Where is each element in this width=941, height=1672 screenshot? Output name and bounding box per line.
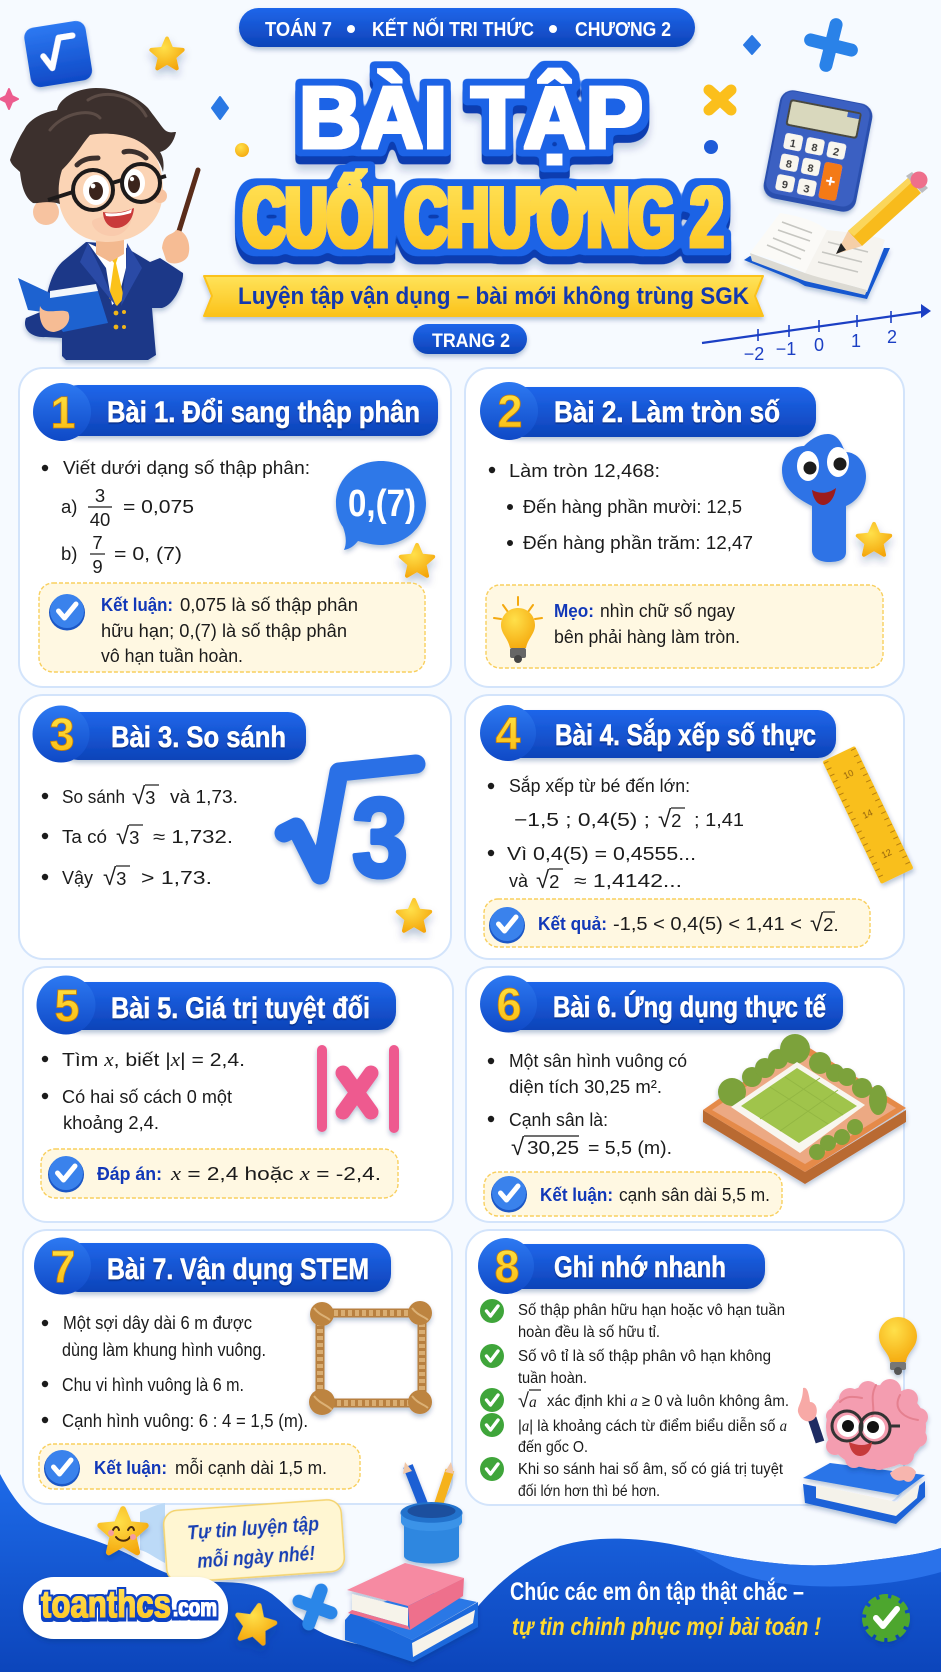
icon: speech bubble 0,(7) <box>336 461 426 550</box>
illustration: square yard garden <box>703 1034 906 1184</box>
teacher suit <box>25 242 183 360</box>
icon: calculator: 8 <box>810 142 819 155</box>
teacher head <box>58 132 163 242</box>
icon: star top left <box>151 38 183 68</box>
exercise text 4: −1,5 ; 0,4(5) ; <box>514 809 650 830</box>
icon: square root badge <box>23 20 93 88</box>
icon: speech bubble 0,(7): 0,(7) <box>348 483 416 525</box>
callout: kết luận 1 <box>39 583 425 672</box>
icon: star <box>398 900 430 931</box>
illustration: stacked books <box>345 1563 478 1662</box>
heading 5: Bài 5. Giá trị tuyệt đối <box>111 992 370 1025</box>
illustration: brain mascot on book <box>798 1379 928 1524</box>
heading 7: 7 <box>50 1241 76 1292</box>
number line: 1 <box>851 331 861 351</box>
exercise text 6: Một sân hình vuông có <box>509 1050 687 1071</box>
brain face <box>832 1411 900 1456</box>
exercise text 7 <box>42 1312 308 1431</box>
heading 2: 2 <box>497 386 523 437</box>
exercise text 3: Ta có <box>62 826 107 847</box>
exercise text 7: dùng làm khung hình vuông. <box>62 1339 266 1360</box>
brain book <box>803 1463 925 1524</box>
exercise text 6: √ <box>511 1134 525 1161</box>
callout: kết quả: -1,5 < 0,4(5) < 1,41 < <box>613 913 802 934</box>
teacher pointer <box>170 170 198 260</box>
exercise text 6: diện tích 30,25 m². <box>509 1076 662 1097</box>
exercise text 3 <box>42 783 238 891</box>
top tag pill: KẾT NỐI TRI THỨC <box>372 17 534 41</box>
illustration: pencil cup <box>400 1462 462 1564</box>
heading 6: Bài 6. Ứng dụng thực tế <box>553 990 826 1024</box>
exercise text 5: Tìm x, biết | x| = 2,4. <box>62 1049 245 1071</box>
callout: kết luận 6: cạnh sân dài 5,5 m. <box>619 1184 770 1205</box>
icon: plus bottom <box>293 1584 337 1630</box>
decorative shapes <box>0 20 856 157</box>
exercise text 2: Đến hàng phần mười: 12,5 <box>523 496 742 517</box>
icon: smiling number mascot <box>782 434 866 562</box>
heading 7: Bài 7. Vận dụng STEM <box>107 1253 369 1286</box>
exercise text 6: Cạnh sân là: <box>509 1109 608 1130</box>
exercise text 4: ≈ 1,4142... <box>574 870 682 891</box>
logo pill <box>23 1577 228 1639</box>
panel 3: so sánh <box>19 695 451 959</box>
heading 5: 5 <box>54 980 80 1031</box>
icon: calculator: + <box>824 171 837 192</box>
callout: đáp án: x = 2,4 hoặc x = -2,4. <box>170 1163 381 1185</box>
icon: light bulb <box>494 597 542 663</box>
callout: kết quả: Kết quả: <box>538 913 607 934</box>
icon: green check badge <box>866 1598 906 1638</box>
icon: rope square <box>309 1301 432 1415</box>
top tag pill <box>239 8 695 47</box>
exercise text 6: 30,25 <box>527 1137 579 1158</box>
panel 6: ứng dụng thực tế <box>466 967 906 1222</box>
number line: 0 <box>814 335 824 355</box>
teacher eyes and glasses <box>83 175 109 205</box>
ribbon curl <box>140 1503 165 1563</box>
main title line 2: CUỐI CHƯƠNG 2 <box>243 170 723 266</box>
number line: 2 <box>887 327 897 347</box>
exercise text 5: khoảng 2,4. <box>63 1112 159 1133</box>
exercise text 4: √2 <box>536 867 559 894</box>
exercise text 2 <box>489 460 753 553</box>
page label pill <box>413 324 527 354</box>
teacher hair <box>10 88 176 204</box>
logo pill: toanthcs <box>41 1584 171 1626</box>
exercise text 3: và 1,73. <box>170 786 238 807</box>
callout: đáp án: Đáp án: <box>97 1163 162 1184</box>
exercise text 1 <box>42 457 310 577</box>
panel 2: làm tròn số <box>465 368 904 687</box>
exercise text 1: 7 <box>92 532 103 553</box>
heading 6: 6 <box>496 979 522 1030</box>
subtitle ribbon: Luyện tập vận dụng – bài mới không trùng SGK <box>238 283 750 310</box>
icon: absolute value x <box>322 1050 394 1128</box>
callout: kết luận 6 <box>484 1172 782 1216</box>
closing message: tự tin chinh phục mọi bài toán ! <box>512 1613 821 1641</box>
heading 4 <box>480 705 836 761</box>
heading 1: Bài 1. Đổi sang thập phân <box>107 396 420 429</box>
heading 1: 1 <box>50 387 76 438</box>
icon: light bulb panel 8 <box>879 1317 917 1375</box>
exercise text 1: 40 <box>90 509 110 530</box>
message note: Tự tin luyện tập <box>187 1513 320 1545</box>
exercise text 1: a) <box>61 496 77 517</box>
icon: ruler: 12 <box>880 847 893 860</box>
heading 4: Bài 4. Sắp xếp số thực <box>555 718 816 752</box>
brain arm and hand <box>812 1418 820 1442</box>
icon: star bottom <box>233 1601 278 1645</box>
icon: calculator: 2 <box>832 146 840 159</box>
exercise text 3: So sánh <box>62 786 125 807</box>
panel 8: ghi nhớ nhanh <box>466 1230 904 1505</box>
exercise text 4: ; 1,41 <box>694 809 744 830</box>
illustration: teacher character <box>10 88 198 360</box>
callout: kết luận 6: Kết luận: <box>540 1184 613 1205</box>
panel 4: sắp xếp số thực <box>465 695 914 959</box>
reminder list: hoàn đều là số hữu tỉ. <box>518 1324 660 1341</box>
top tag pill: CHƯƠNG 2 <box>575 19 671 41</box>
reminder list: |a| là khoảng cách từ điểm biểu diễn số a <box>518 1418 787 1435</box>
icon: ruler: 14 <box>861 807 874 821</box>
heading 5 <box>36 976 396 1034</box>
icon: star <box>401 545 433 576</box>
callout: smiling star with encouragement <box>100 1499 345 1583</box>
number line: −1 <box>776 339 796 359</box>
icon: calculator: 8 <box>806 162 815 175</box>
callout: kết luận 1: 0,075 là số thập phân <box>180 594 358 615</box>
reminder list: đối lớn hơn thì bé hơn. <box>518 1483 660 1500</box>
callout: kết luận 7: Kết luận: <box>94 1457 167 1478</box>
heading 3 <box>32 706 306 762</box>
icon: star <box>858 524 890 555</box>
reminder list: √a <box>518 1390 537 1412</box>
exercise text 3: > 1,73. <box>141 867 212 888</box>
reminder list: đến gốc O. <box>518 1439 588 1456</box>
exercise text 7: Cạnh hình vuông: 6 : 4 = 1,5 (m). <box>62 1410 308 1431</box>
callout: kết quả <box>484 899 870 947</box>
heading 7 <box>34 1238 391 1294</box>
exercise text 4 <box>488 775 744 894</box>
exercise text 5: Có hai số cách 0 một <box>62 1086 232 1107</box>
exercise text 7: Một sợi dây dài 6 m được <box>63 1312 252 1333</box>
icon: ruler: 10 <box>842 768 855 781</box>
exercise text 1: = 0,075 <box>123 496 194 517</box>
exercise text 1: 9 <box>92 556 103 577</box>
exercise text 2: Làm tròn 12,468: <box>509 460 660 481</box>
teacher book <box>18 278 108 332</box>
exercise text 2: Đến hàng phần trăm: 12,47 <box>523 532 753 553</box>
exercise text 3: √3 <box>103 864 126 891</box>
callout: mẹo: nhìn chữ số ngay <box>600 600 736 621</box>
logo pill: .com <box>173 1594 217 1622</box>
subtitle ribbon <box>204 276 763 316</box>
heading 8: Ghi nhớ nhanh <box>554 1251 726 1284</box>
icon: big square root of 3 <box>284 764 416 900</box>
heading 6 <box>480 976 843 1032</box>
callout: kết quả: √2. <box>810 910 839 937</box>
exercise text 1: b) <box>61 543 77 564</box>
icon: calculator: 3 <box>802 183 811 196</box>
reminder list: Khi so sánh hai số âm, số có giá trị tuyệt <box>518 1461 784 1478</box>
closing message: Chúc các em ôn tập thật chắc – <box>510 1576 804 1606</box>
main title line 1: BÀI TẬP <box>299 68 643 167</box>
icon: big square root of 3: 3 <box>352 775 408 900</box>
top tag pill: TOÁN 7 <box>265 18 332 41</box>
exercise text 4: Sắp xếp từ bé đến lớn: <box>509 775 690 796</box>
heading 8: 8 <box>494 1241 520 1292</box>
heading 2 <box>480 382 816 440</box>
icon: calculator: 8 <box>785 158 793 171</box>
heading 1 <box>33 383 438 441</box>
icon: ruler <box>822 746 914 884</box>
heading 3: Bài 3. So sánh <box>111 721 286 754</box>
exercise text 7: Chu vi hình vuông là 6 m. <box>62 1374 244 1395</box>
callout: kết luận 7 <box>39 1444 360 1489</box>
message note: mỗi ngày nhé! <box>196 1542 316 1573</box>
message note <box>163 1499 345 1583</box>
panel 1: đổi sang thập phân <box>19 368 451 687</box>
teacher right hand <box>162 230 189 263</box>
callout: kết luận 1: Kết luận: <box>101 594 173 615</box>
panel 7: vận dụng STEM <box>23 1230 452 1504</box>
callout: mẹo <box>486 585 883 668</box>
exercise text 4: Vì 0,4(5) = 0,4555... <box>507 843 696 864</box>
exercise text 5 <box>42 1049 245 1133</box>
reminder list: Số thập phân hữu hạn hoặc vô hạn tuần <box>518 1302 785 1319</box>
heading 2: Bài 2. Làm tròn số <box>554 396 780 429</box>
icon: open book with pencil <box>744 172 928 299</box>
panel 5: giá trị tuyệt đối <box>23 967 453 1222</box>
page label pill: TRANG 2 <box>432 331 510 352</box>
teacher left hand <box>40 306 69 332</box>
callout: mẹo: bên phải hàng làm tròn. <box>554 626 740 647</box>
exercise text 1: = 0, (7) <box>114 543 182 564</box>
exercise text 1: Viết dưới dạng số thập phân: <box>63 457 310 478</box>
exercise text 3: Vậy <box>62 867 94 888</box>
callout: đáp án <box>41 1149 398 1198</box>
exercise text 3: √3 <box>116 823 139 850</box>
reminder list: Số vô tỉ là số thập phân vô hạn không <box>518 1348 771 1365</box>
number line: −2 <box>744 344 764 364</box>
bottom blue wave background <box>0 1474 941 1672</box>
brain hand on book <box>890 1466 916 1482</box>
closing message <box>510 1576 821 1641</box>
exercise text 4: √2 <box>658 806 681 833</box>
callout: kết luận 7: mỗi cạnh dài 1,5 m. <box>175 1457 327 1478</box>
exercise text 6: = 5,5 (m). <box>588 1137 672 1158</box>
exercise text 1: 3 <box>95 485 105 506</box>
callout: kết luận 1: hữu hạn; 0,(7) là số thập phân <box>101 620 347 641</box>
exercise text 6 <box>488 1050 687 1161</box>
callout: kết luận 1: vô hạn tuần hoàn. <box>101 645 243 666</box>
reminder list: xác định khi a ≥ 0 và luôn không âm. <box>547 1393 789 1410</box>
heading 4: 4 <box>495 708 521 759</box>
reminder list <box>480 1299 789 1500</box>
icon: calculator <box>761 88 875 214</box>
brain body <box>826 1379 928 1470</box>
reminder list: tuần hoàn. <box>518 1370 587 1387</box>
exercise text 4: và <box>509 870 529 891</box>
icon: calculator: 1 <box>789 138 797 151</box>
smiling star <box>100 1509 146 1552</box>
teacher mouth <box>103 208 134 228</box>
number line <box>702 304 931 364</box>
icon: calculator: 9 <box>781 179 789 192</box>
exercise text 3: √3 <box>132 783 155 810</box>
callout: mẹo: Mẹo: <box>554 600 594 621</box>
heading 3: 3 <box>49 709 75 760</box>
exercise text 3: ≈ 1,732. <box>153 826 233 847</box>
heading 8 <box>478 1238 765 1294</box>
